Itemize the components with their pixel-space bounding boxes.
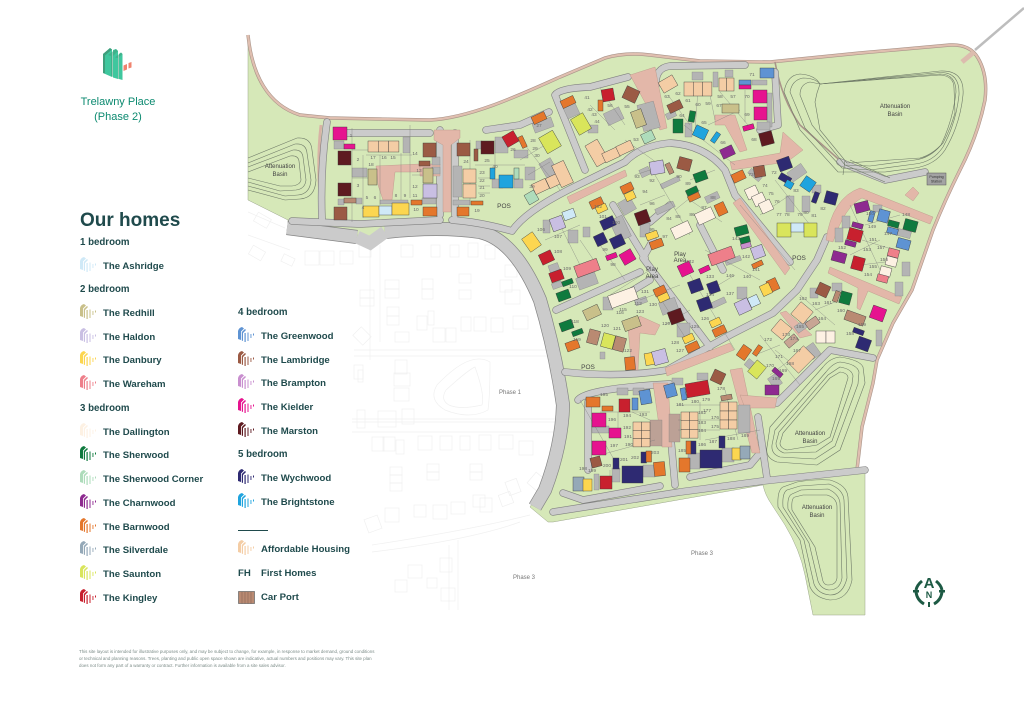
plot numbers: 196	[608, 417, 616, 423]
map labels: Basin	[802, 439, 818, 445]
plot numbers: 125	[691, 324, 699, 330]
map labels: Basin	[887, 112, 903, 118]
plot numbers: 40	[492, 164, 498, 170]
map labels: Area	[646, 274, 659, 280]
plot numbers	[350, 72, 910, 474]
plot numbers: 57	[730, 94, 736, 100]
plot numbers: 89	[685, 181, 691, 187]
map labels: Attenuation	[880, 104, 910, 110]
plot numbers: 10	[413, 207, 419, 213]
plot numbers: 60	[695, 102, 701, 108]
plot numbers: 92	[649, 178, 655, 184]
plot numbers: 16	[381, 155, 387, 161]
plot numbers: 81	[811, 213, 817, 219]
legend: The Silverdale	[80, 541, 168, 556]
estate roads	[292, 65, 925, 512]
plot numbers: 170	[766, 363, 774, 369]
plot numbers: 126	[701, 316, 709, 322]
plot numbers: 168	[786, 361, 794, 367]
plot numbers: 66	[720, 140, 726, 146]
north arrow: A	[924, 575, 935, 592]
plot numbers: 23	[479, 170, 485, 176]
plot numbers: 100	[612, 220, 620, 226]
plot numbers: 22	[479, 178, 485, 184]
legend: Affordable Housing	[238, 540, 350, 555]
text: The Wareham	[103, 379, 166, 390]
disclaimer	[79, 649, 374, 668]
text: The Saunton	[103, 569, 161, 580]
legend: The Haldon	[80, 328, 155, 343]
crescent homes	[736, 302, 820, 395]
text: The Haldon	[103, 332, 155, 343]
plot numbers: 30	[534, 153, 540, 159]
plot numbers: 175	[711, 424, 719, 430]
legend: First Homes: First Homes	[261, 568, 316, 579]
plot numbers: 202	[631, 455, 639, 461]
north-east block homes	[731, 156, 838, 237]
plot numbers: 127	[676, 348, 684, 354]
plot numbers: 108	[554, 249, 562, 255]
middle block homes	[620, 157, 780, 337]
plot numbers: 78	[784, 212, 790, 218]
plot numbers: 85	[675, 214, 681, 220]
plot numbers: 17	[370, 155, 376, 161]
legend: The Wareham	[80, 375, 166, 390]
plot numbers: 177	[703, 408, 711, 414]
plot numbers: 43	[591, 112, 597, 118]
map labels: POS	[581, 364, 596, 371]
footpath boundary	[248, 8, 1024, 470]
plot numbers: 185	[678, 448, 686, 454]
plot numbers: 142	[742, 254, 750, 260]
legend: The Charnwood	[80, 494, 175, 509]
plot numbers: 74	[762, 183, 768, 189]
plot numbers: 8	[395, 193, 398, 199]
plot numbers: 186	[698, 442, 706, 448]
plot numbers: 134	[706, 292, 714, 298]
plot numbers: 14	[412, 151, 418, 157]
text: The Greenwood	[261, 331, 334, 342]
plot numbers: 44	[594, 119, 600, 125]
text: The Lambridge	[261, 355, 330, 366]
plot numbers: 191	[624, 434, 632, 440]
green site area	[248, 35, 986, 615]
text: The Silverdale	[103, 545, 168, 556]
plot numbers: 59	[705, 101, 711, 107]
plot numbers: 72	[771, 170, 777, 176]
north arrow	[913, 575, 945, 607]
development name: Trelawny Place	[81, 96, 155, 108]
plot numbers: 149	[868, 224, 876, 230]
plot numbers: 106	[537, 227, 545, 233]
plot numbers: 77	[776, 212, 782, 218]
plot numbers: 121	[613, 326, 621, 332]
plot numbers: 21	[479, 185, 485, 191]
plot numbers: 9	[404, 193, 407, 199]
plot numbers: 58	[717, 94, 723, 100]
plot numbers: 39	[529, 184, 535, 190]
heading: Our homes: Our homes	[80, 210, 180, 231]
north block homes	[658, 68, 774, 159]
plot numbers: 132	[686, 259, 694, 265]
development name: (Phase 2)	[94, 111, 142, 123]
plot numbers: 13	[416, 168, 422, 174]
text: The Danbury	[103, 355, 162, 366]
legend: Car Port	[238, 591, 299, 604]
attenuation basins	[248, 71, 963, 600]
plot numbers: 123	[636, 309, 644, 315]
map labels	[265, 104, 910, 581]
text: The Marston	[261, 426, 318, 437]
plot numbers: 167	[793, 348, 801, 354]
plot numbers: 15	[390, 155, 396, 161]
plot numbers: 61	[685, 98, 691, 104]
plot numbers: 164	[818, 316, 826, 322]
plot numbers: 189	[741, 433, 749, 439]
map labels: Attenuation	[802, 505, 832, 511]
development name	[80, 96, 155, 123]
text: The Brampton	[261, 378, 326, 389]
legend: 3 bedroom: 3 bedroom	[80, 403, 130, 414]
plot numbers: 137	[726, 291, 734, 297]
plot numbers: 155	[869, 264, 877, 270]
plot numbers: 183	[698, 420, 706, 426]
legend: The Sherwood	[80, 446, 169, 461]
plot numbers: 181	[676, 402, 684, 408]
text: The Kingley	[103, 593, 157, 604]
map labels: Play	[674, 252, 686, 258]
plot numbers: 188	[727, 436, 735, 442]
plot numbers: 62	[675, 91, 681, 97]
map labels: Phase 3	[513, 575, 536, 581]
pumping station	[927, 173, 946, 185]
plot numbers: 6	[374, 195, 377, 201]
disclaimer: or technical and planning reasons. Trees, planting and public open space shown are indicative, actual numbers and positions may vary. This site plan	[79, 656, 372, 661]
plot numbers: 64	[679, 113, 685, 119]
plot numbers: 195	[600, 392, 608, 398]
plot numbers: 156	[880, 257, 888, 263]
plot numbers: 151	[869, 237, 877, 243]
plot numbers: 41	[584, 95, 590, 101]
plot numbers: 29	[532, 146, 538, 152]
plot numbers: 162	[799, 296, 807, 302]
plot numbers: 97	[662, 234, 668, 240]
legend: The Kingley	[80, 589, 158, 604]
legend: The Ashridge	[80, 257, 164, 272]
text: The Sherwood Corner	[103, 474, 203, 485]
homes	[333, 68, 918, 491]
plot numbers: 203	[651, 450, 659, 456]
plot numbers: 18	[368, 162, 374, 168]
plot numbers: 12	[412, 184, 418, 190]
plot numbers: 110	[569, 284, 577, 290]
plot numbers: 95	[649, 227, 655, 233]
plot numbers: 178	[717, 386, 725, 392]
plot numbers: 83	[793, 188, 799, 194]
text: The Barnwood	[103, 522, 170, 533]
parking courts	[334, 70, 912, 490]
plot numbers: 99	[602, 247, 608, 253]
plot numbers: 140	[743, 274, 751, 280]
plot numbers: 154	[864, 272, 872, 278]
plot numbers: 197	[610, 443, 618, 449]
plot numbers: 201	[620, 457, 628, 463]
plot numbers: 80	[803, 210, 809, 216]
plot numbers: 53	[633, 137, 639, 143]
plot numbers: 26	[510, 147, 516, 153]
plot numbers: 28	[530, 138, 536, 144]
plot numbers: 96	[649, 201, 655, 207]
plot numbers: 98	[610, 262, 616, 268]
plot numbers: 161	[824, 300, 832, 306]
plot numbers: 187	[709, 439, 717, 445]
plot numbers: 67	[716, 103, 722, 109]
map labels: Play	[646, 267, 658, 273]
legend: The Marston	[238, 422, 318, 437]
text: The Brightstone	[261, 497, 335, 508]
plot numbers: 143	[732, 236, 740, 242]
main access road	[287, 228, 563, 507]
central block homes	[457, 86, 656, 216]
west block homes	[333, 127, 437, 220]
plot numbers: 75	[768, 191, 774, 197]
plot numbers: 147	[884, 231, 892, 237]
plot numbers: 129	[662, 321, 670, 327]
plot numbers: 65	[701, 120, 707, 126]
map labels: Phase 3	[691, 551, 714, 557]
map labels: Basin	[272, 172, 288, 178]
plot numbers: 158	[846, 331, 854, 337]
disclaimer: does not form any part of a warranty or contract. Further information is available from a site sales advisor.	[79, 663, 286, 668]
pumping station: Pumping	[929, 175, 944, 179]
plot numbers: 198	[579, 466, 587, 472]
plot numbers: 199	[588, 468, 596, 474]
plot numbers: 171	[775, 354, 783, 360]
plot numbers: 157	[877, 245, 885, 251]
plot numbers: 115	[619, 307, 627, 313]
text: The Redhill	[103, 308, 155, 319]
map labels: Phase 1	[499, 390, 522, 396]
south-west block homes	[573, 389, 666, 491]
logo	[103, 48, 132, 80]
plot numbers: 101	[599, 214, 607, 220]
map labels: Area	[674, 258, 687, 264]
text: The Dallington	[103, 427, 170, 438]
legend: The Barnwood	[80, 518, 170, 533]
text: The Kielder	[261, 402, 313, 413]
text: The Ashridge	[103, 261, 164, 272]
plot numbers: 169	[779, 368, 787, 374]
plot boundary lines	[352, 88, 900, 485]
legend: 2 bedroom: 2 bedroom	[80, 284, 130, 295]
plot numbers: 165	[796, 324, 804, 330]
neighbouring phase outlines	[248, 212, 555, 610]
legend: 5 bedroom: 5 bedroom	[238, 449, 288, 460]
plot numbers: 63	[664, 94, 670, 100]
plot numbers: 113	[634, 301, 642, 307]
legend: The Wychwood	[238, 469, 331, 484]
plot numbers: 11	[413, 193, 418, 199]
legend: The Sherwood Corner	[80, 470, 204, 485]
plot numbers: 128	[671, 340, 679, 346]
west crescent homes	[522, 197, 700, 370]
plot numbers: 27	[536, 123, 542, 129]
plot numbers: 184	[698, 428, 706, 434]
plot numbers: 107	[554, 234, 562, 240]
plot numbers: 4	[362, 205, 365, 211]
plot numbers: 76	[774, 199, 780, 205]
plot numbers: 82	[820, 206, 826, 212]
legend: The Saunton	[80, 565, 161, 580]
plot numbers: 19	[474, 208, 480, 214]
plot numbers: 69	[744, 112, 750, 118]
plot numbers: 73	[748, 172, 754, 178]
plot numbers: 131	[641, 289, 649, 295]
plot numbers: 159	[858, 322, 866, 328]
map labels: Attenuation	[265, 164, 295, 170]
plot numbers: 118	[571, 319, 579, 325]
legend: The Greenwood	[238, 327, 334, 342]
plot numbers: 146	[726, 273, 734, 279]
plot numbers: 141	[752, 267, 760, 273]
text: Affordable Housing	[261, 544, 350, 555]
text: The Charnwood	[103, 498, 175, 509]
plot numbers: 122	[624, 348, 632, 354]
plot numbers: 79	[797, 212, 803, 218]
legend: The Dallington	[80, 423, 170, 438]
plot numbers: 102	[594, 204, 602, 210]
plot numbers: 148	[902, 212, 910, 218]
disclaimer: This site layout is intended for illustrative purposes only, and may be subject to change, for example, in response to market demand, ground conditions	[79, 649, 374, 654]
plot numbers: 150	[866, 211, 874, 217]
plot numbers: 176	[711, 415, 719, 421]
plot numbers: 200	[603, 463, 611, 469]
plot numbers: 90	[676, 174, 682, 180]
legend: Car Port: Car Port	[261, 592, 299, 603]
plot numbers: 86	[689, 212, 695, 218]
plot numbers: 71	[749, 72, 755, 78]
pumping station: Station	[931, 180, 942, 184]
map labels: Basin	[809, 513, 825, 519]
plot numbers: 25	[484, 158, 490, 164]
map labels: POS	[792, 255, 807, 262]
plot numbers: 94	[642, 189, 648, 195]
legend: The Redhill	[80, 304, 155, 319]
legend: 1 bedroom: 1 bedroom	[80, 237, 130, 248]
plot numbers: 24	[463, 159, 469, 165]
south-east block homes	[664, 369, 750, 472]
plot numbers: 120	[601, 323, 609, 329]
plot numbers: 88	[710, 195, 716, 201]
plot numbers: 42	[587, 107, 593, 113]
plot numbers: 180	[691, 399, 699, 405]
legend: The Danbury	[80, 351, 162, 366]
plot numbers: 2	[357, 157, 360, 163]
plot numbers: 116	[616, 310, 624, 316]
plot numbers: 119	[573, 337, 581, 343]
plot numbers: 84	[666, 216, 672, 222]
plot numbers: 5	[366, 195, 369, 201]
plot numbers: 130	[649, 302, 657, 308]
plot numbers: 174	[790, 336, 798, 342]
map labels: Attenuation	[795, 431, 825, 437]
plot numbers: 133	[706, 274, 714, 280]
plot numbers: 190	[625, 442, 633, 448]
plot numbers: 68	[751, 137, 757, 143]
plot numbers: 153	[863, 247, 871, 253]
legend: The Brampton	[238, 374, 326, 389]
plot numbers: 169	[772, 376, 780, 382]
plot numbers: 109	[563, 266, 571, 272]
plot numbers: 173	[782, 332, 790, 338]
plot numbers: 160	[837, 308, 845, 314]
plot numbers: 1	[350, 133, 353, 139]
plot numbers: 70	[744, 94, 750, 100]
plot numbers: 179	[702, 397, 710, 403]
plot numbers: 194	[623, 413, 631, 419]
plot numbers: 172	[764, 337, 772, 343]
plot numbers: 152	[838, 245, 846, 251]
legend: The Lambridge	[238, 351, 330, 366]
map labels: POS	[497, 203, 512, 210]
legend: The Brightstone	[238, 493, 335, 508]
legend: 4 bedroom: 4 bedroom	[238, 307, 288, 318]
north arrow: N	[926, 590, 932, 600]
plot numbers: 192	[623, 425, 631, 431]
plot numbers: 55	[624, 104, 630, 110]
plot numbers: 87	[701, 205, 707, 211]
plot numbers: 182	[698, 410, 706, 416]
plot numbers: 93	[634, 174, 640, 180]
text: The Wychwood	[261, 473, 331, 484]
plot numbers: 193	[639, 412, 647, 418]
text: The Sherwood	[103, 450, 169, 461]
east block homes	[815, 200, 918, 352]
plot numbers: 163	[812, 301, 820, 307]
block-paved shared surfaces	[376, 67, 933, 453]
plot numbers: 56	[607, 103, 613, 109]
legend: First Homes: FH	[238, 568, 251, 579]
plot numbers: 20	[479, 193, 485, 199]
legend: The Kielder	[238, 398, 314, 413]
plot numbers: 3	[357, 183, 360, 189]
